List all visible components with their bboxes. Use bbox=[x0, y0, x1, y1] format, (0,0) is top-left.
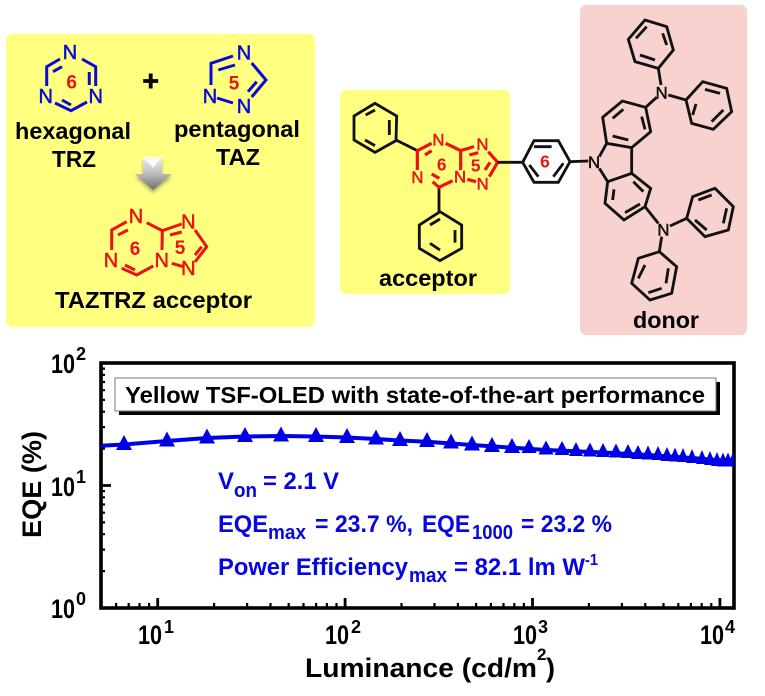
TAZTRZ fused structure: N bbox=[154, 250, 169, 272]
x axis tick labels: 1 bbox=[164, 617, 174, 637]
label: pentagonal: pentagonal bbox=[174, 116, 300, 142]
hexagonal TRZ structure: N bbox=[88, 86, 103, 108]
x axis tick labels: 3 bbox=[538, 617, 548, 637]
acceptor core: N bbox=[476, 135, 488, 154]
annotation: EQE values: = 23.2 % bbox=[521, 511, 612, 538]
y axis tick labels bbox=[51, 344, 86, 624]
carbazole core: N bbox=[588, 153, 600, 172]
diphenylamine lower: N bbox=[657, 220, 669, 239]
label: TRZ: TRZ bbox=[52, 146, 96, 172]
linker phenyl: 6 bbox=[540, 151, 550, 171]
label: donor: donor bbox=[633, 307, 699, 333]
chart: EQE versus luminance bbox=[17, 344, 739, 683]
annotation: EQE values: EQE bbox=[422, 511, 470, 538]
plus sign bbox=[143, 74, 158, 88]
data series: EQE curve with triangle markers bbox=[101, 426, 739, 466]
TAZTRZ fused structure: N bbox=[181, 212, 196, 234]
diphenylamine upper: N bbox=[656, 83, 668, 102]
panel: donor background bbox=[580, 5, 747, 335]
TAZTRZ fused structure: N bbox=[181, 258, 196, 280]
annotation: turn-on voltage: on bbox=[234, 480, 257, 502]
annotation: power efficiency: max bbox=[409, 565, 447, 587]
legend box: Yellow TSF-OLED with state-of-the-art performance bbox=[125, 382, 705, 408]
hexagonal TRZ structure bbox=[38, 42, 103, 111]
annotation: EQE values: 1000 bbox=[472, 522, 513, 544]
TAZTRZ fused structure: N bbox=[129, 206, 143, 228]
pentagonal TAZ structure: 5 bbox=[229, 74, 240, 94]
label: acceptor: acceptor bbox=[379, 265, 477, 291]
arrow: down bbox=[135, 157, 172, 193]
acceptor phenyl left bbox=[354, 103, 417, 152]
legend box bbox=[115, 378, 720, 415]
hexagonal TRZ structure: 6 bbox=[66, 72, 77, 94]
acceptor core: 5 bbox=[471, 156, 481, 176]
y axis tick labels: 10 bbox=[51, 349, 75, 379]
annotation: EQE values bbox=[218, 511, 612, 544]
label: TAZTRZ acceptor: TAZTRZ acceptor bbox=[55, 287, 252, 313]
x axis title: 2 bbox=[537, 645, 546, 664]
x axis tick labels: 10 bbox=[325, 620, 349, 650]
acceptor phenyl bottom bbox=[419, 187, 462, 261]
x axis tick labels: 10 bbox=[513, 620, 537, 650]
x axis title: Luminance (cd/m bbox=[305, 653, 537, 683]
annotation: EQE values: EQE bbox=[218, 511, 268, 538]
y axis tick labels: 2 bbox=[76, 344, 86, 364]
hexagonal TRZ structure: N bbox=[38, 86, 53, 108]
annotation: power efficiency: -1 bbox=[585, 552, 598, 569]
annotation: turn-on voltage bbox=[218, 468, 339, 502]
pentagonal TAZ structure: N bbox=[203, 86, 217, 108]
x axis tick labels: 2 bbox=[351, 617, 361, 637]
linker phenyl bbox=[498, 141, 588, 182]
annotation: power efficiency: = 82.1 lm W bbox=[454, 554, 585, 581]
annotation: turn-on voltage: V bbox=[218, 468, 234, 495]
label: TAZ: TAZ bbox=[216, 144, 260, 170]
annotation: EQE values: max bbox=[268, 522, 306, 544]
y axis tick labels: 0 bbox=[76, 589, 86, 609]
y axis tick labels: 1 bbox=[76, 467, 86, 487]
annotation: EQE values: = 23.7 %, bbox=[315, 511, 413, 538]
y axis title: EQE (%) bbox=[17, 431, 47, 538]
pentagonal TAZ structure bbox=[203, 42, 266, 118]
acceptor core: N bbox=[432, 130, 444, 149]
diphenylamine lower bbox=[632, 188, 733, 300]
x axis tick labels: 10 bbox=[138, 620, 162, 650]
pentagonal TAZ structure: N bbox=[237, 42, 251, 64]
y axis tick labels: 10 bbox=[51, 594, 75, 624]
TAZTRZ fused structure: 6 bbox=[130, 239, 140, 260]
plot frame bbox=[101, 363, 734, 608]
acceptor core: 6 bbox=[437, 154, 447, 174]
x axis title: ) bbox=[546, 653, 555, 683]
acceptor core: N bbox=[477, 174, 489, 193]
hexagonal TRZ structure: N bbox=[63, 42, 77, 64]
acceptor core: N bbox=[411, 168, 423, 187]
acceptor core: N bbox=[454, 168, 466, 187]
TAZTRZ fused structure bbox=[104, 206, 207, 280]
x axis tick labels: 10 bbox=[700, 620, 724, 650]
axis ticks bbox=[101, 486, 720, 608]
panel: TAZTRZ design concept bbox=[6, 34, 315, 327]
acceptor core bbox=[411, 130, 498, 193]
annotation: turn-on voltage: = 2.1 V bbox=[263, 468, 339, 495]
y axis tick labels: 10 bbox=[51, 472, 75, 502]
pentagonal TAZ structure: N bbox=[237, 96, 251, 118]
annotation: power efficiency: Power Efficiency bbox=[218, 554, 409, 581]
annotation: power efficiency bbox=[218, 552, 598, 587]
x axis tick labels: 4 bbox=[725, 617, 735, 637]
carbazole core bbox=[588, 101, 651, 220]
diphenylamine upper bbox=[628, 20, 732, 129]
TAZTRZ fused structure: N bbox=[104, 250, 118, 272]
panel: acceptor background bbox=[340, 90, 510, 294]
label: hexagonal TRZ: hexagonal bbox=[15, 118, 131, 144]
TAZTRZ fused structure: 5 bbox=[175, 238, 186, 259]
x axis tick labels bbox=[138, 617, 735, 650]
molecule: acceptor-linker-donor structure bbox=[354, 20, 733, 300]
